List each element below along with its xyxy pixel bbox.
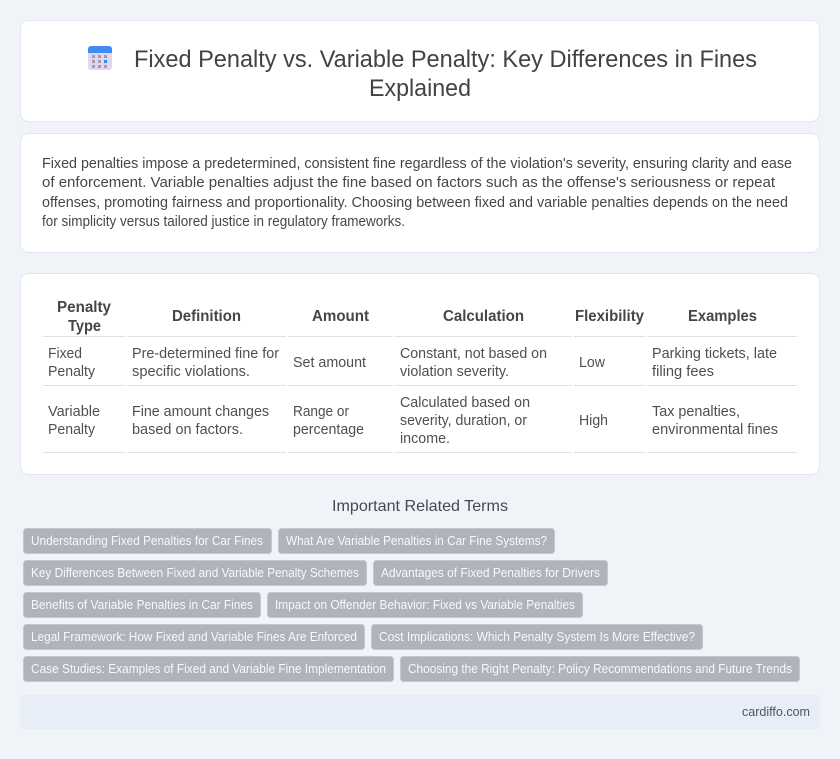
table row: fixed penalty: Penalty bbox=[48, 364, 96, 380]
table header row: Examples bbox=[688, 308, 757, 325]
table row: fixed penalty: specific violations. bbox=[132, 364, 250, 380]
table row: fixed penalty: Set amount bbox=[293, 355, 366, 371]
related term chips bbox=[24, 528, 800, 682]
text block: summary paragraph: of enforcement. Variable penalties adjust the fine based on factors such as the offense's seriousness or repeat bbox=[42, 175, 775, 191]
heading: important related terms: Important Related Terms bbox=[332, 498, 508, 515]
table row: variable penalty: Calculated based on bbox=[400, 395, 530, 411]
table row: variable penalty: severity, duration, or bbox=[400, 413, 527, 429]
text block: summary paragraph: for simplicity versus tailored justice in regulatory frameworks. bbox=[42, 214, 405, 230]
table row: fixed penalty: Fixed bbox=[48, 346, 82, 362]
related term chips: What Are Variable Penalties in Car Fine Systems? bbox=[286, 534, 547, 548]
panel: comparison table bbox=[20, 274, 820, 474]
table header row bbox=[57, 299, 757, 335]
table row: fixed penalty: Parking tickets, late bbox=[652, 346, 777, 362]
footer: cardiffo.com bbox=[742, 705, 810, 719]
panel: summary bbox=[20, 134, 820, 252]
icon: calendar bbox=[88, 46, 112, 70]
table row: fixed penalty: Pre-determined fine for bbox=[132, 346, 279, 362]
table row: variable penalty: environmental fines bbox=[652, 422, 778, 438]
text block: summary paragraph: Fixed penalties impose a predetermined, consistent fine regardless of the violation's severity, ensuring clarity and ease bbox=[42, 156, 792, 172]
related term chips: Impact on Offender Behavior: Fixed vs Variable Penalties bbox=[275, 598, 575, 612]
table row: fixed penalty: Constant, not based on bbox=[400, 346, 547, 362]
text block: summary paragraph: offenses, promoting fairness and proportionality. Choosing between fixed and variable penalties depends on the need bbox=[42, 195, 788, 211]
table row: fixed penalty: violation severity. bbox=[400, 364, 509, 380]
table row: variable penalty: Penalty bbox=[48, 422, 96, 438]
table header row: Calculation bbox=[443, 308, 524, 325]
table header row: Flexibility bbox=[575, 308, 644, 325]
table row: fixed penalty: filing fees bbox=[652, 364, 714, 380]
related term chips: Legal Framework: How Fixed and Variable Fines Are Enforced bbox=[31, 630, 357, 644]
table row: variable penalty bbox=[48, 395, 778, 447]
table header row: Amount bbox=[312, 308, 369, 325]
table row: variable penalty: Tax penalties, bbox=[652, 404, 740, 420]
table row: variable penalty: based on factors. bbox=[132, 422, 243, 438]
title: Fixed Penalty vs. Variable Penalty: Key Differences in Fines bbox=[134, 46, 757, 73]
table row: variable penalty: High bbox=[579, 413, 608, 429]
table row: fixed penalty bbox=[48, 346, 777, 380]
table header row: Penalty bbox=[57, 299, 111, 316]
table row: variable penalty: Variable bbox=[48, 404, 100, 420]
related term chips: Advantages of Fixed Penalties for Drivers bbox=[381, 566, 600, 580]
footer bbox=[20, 695, 820, 729]
panel: header bbox=[20, 20, 820, 122]
text block: summary paragraph bbox=[42, 156, 792, 230]
title: Explained bbox=[369, 75, 471, 102]
related term chips: Cost Implications: Which Penalty System Is More Effective? bbox=[379, 630, 695, 644]
related term chips: Case Studies: Examples of Fixed and Variable Fine Implementation bbox=[31, 662, 386, 676]
title bbox=[134, 46, 757, 102]
table header row: Definition bbox=[172, 308, 241, 325]
related term chips: Benefits of Variable Penalties in Car Fines bbox=[31, 598, 253, 612]
related term chips: Key Differences Between Fixed and Variable Penalty Schemes bbox=[31, 566, 359, 580]
table row: variable penalty: income. bbox=[400, 431, 450, 447]
table row: variable penalty: Range or bbox=[293, 404, 349, 420]
table header row: Type bbox=[68, 318, 101, 335]
related term chips: Understanding Fixed Penalties for Car Fines bbox=[31, 534, 263, 548]
table row: variable penalty: percentage bbox=[293, 422, 364, 438]
table row: variable penalty: Fine amount changes bbox=[132, 404, 269, 420]
table row: fixed penalty: Low bbox=[579, 355, 606, 371]
related term chips: Choosing the Right Penalty: Policy Recommendations and Future Trends bbox=[408, 662, 792, 676]
